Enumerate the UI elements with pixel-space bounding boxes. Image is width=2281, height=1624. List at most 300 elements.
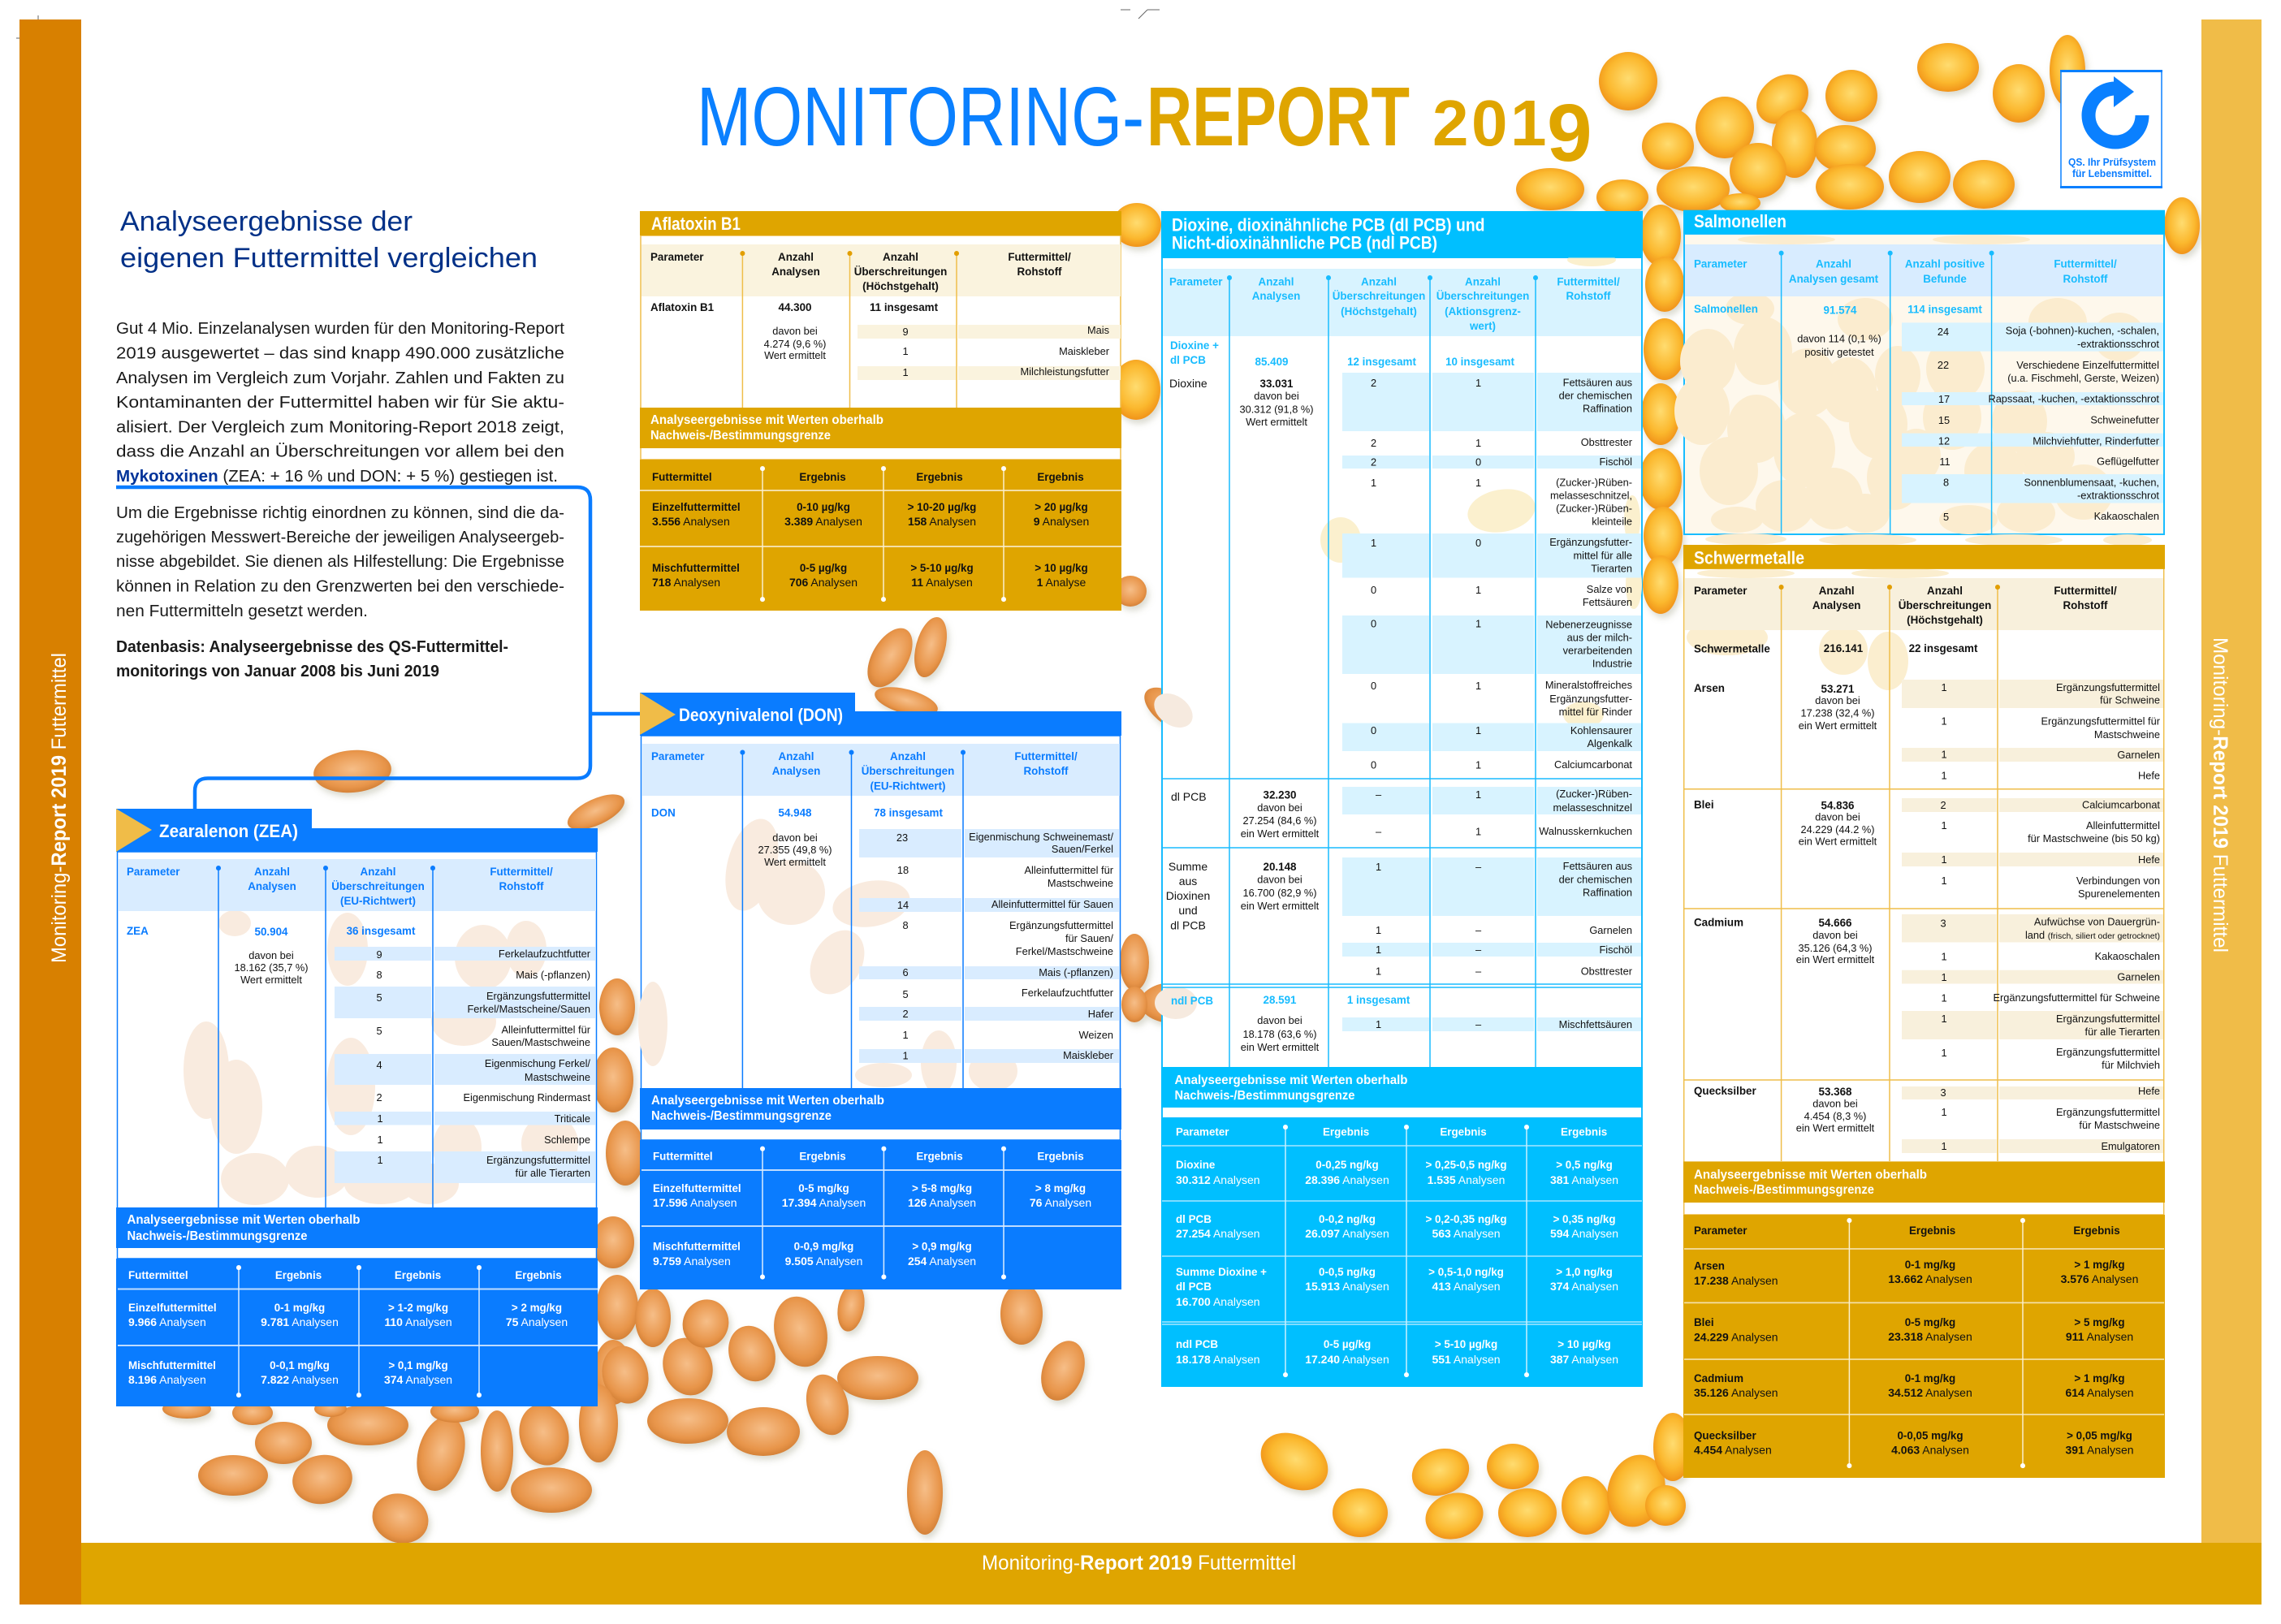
results table: > 0,2-0,35 ng/kg — [1425, 1213, 1507, 1225]
subheading band: Nachweis-/Bestimmungsgrenze — [1694, 1183, 1874, 1197]
subheading band: Nachweis-/Bestimmungsgrenze — [650, 429, 831, 443]
table rows: Soja (-bohnen)-kuchen, -schalen, — [2006, 325, 2159, 337]
rows: dl PCB: – — [1376, 788, 1382, 801]
text block: data basis: Datenbasis: Analyseergebnisse des QS-Futtermittel- — [116, 638, 508, 656]
table rows: Verschiedene Einzelfuttermittel — [2016, 359, 2159, 371]
results table: 15.913 Analysen — [1305, 1280, 1389, 1293]
table rows: 17 — [1938, 393, 1950, 405]
rows: Dioxine + dl PCB: 10 insgesamt — [1445, 356, 1514, 368]
logo: QS: QS. Ihr Prüfsystem — [2068, 156, 2156, 168]
rows: Quecksilber: ein Wert ermittelt — [1796, 1122, 1875, 1134]
rows: Dioxine + dl PCB — [1169, 339, 1633, 771]
rows: Quecksilber: für Mastschweine — [2079, 1119, 2160, 1131]
results table: > 5-8 mg/kg — [912, 1182, 972, 1194]
table rows: 1 — [902, 345, 909, 357]
rows: Cadmium: für Milchvieh — [2102, 1059, 2160, 1071]
rows: Dioxine + dl PCB: 0 — [1371, 724, 1376, 736]
table rows: positiv getestet — [1804, 346, 1874, 358]
results table: > 0,35 ng/kg — [1553, 1213, 1616, 1225]
rows: Dioxine + dl PCB: der chemischen — [1559, 390, 1632, 401]
rows: Summe aus Dioxinen und dl PCB: dl PCB — [1170, 919, 1206, 932]
rows: Dioxine + dl PCB: Fischöl — [1599, 456, 1632, 468]
logo: QS — [2060, 70, 2162, 188]
rows: Arsen: 1 — [1941, 749, 1947, 760]
title: MONITORING- — [697, 70, 1144, 163]
rows: Quecksilber: Hefe — [2138, 1085, 2160, 1097]
results table: 76 Analysen — [1030, 1196, 1091, 1209]
results table: Futtermittel — [128, 1269, 188, 1281]
results table: 4.454 Analysen — [1694, 1444, 1772, 1457]
rows: Blei: Spurenelementen — [2078, 888, 2160, 900]
results table: ndl PCB — [1176, 1338, 1218, 1350]
table header: Futtermittel/ — [1008, 251, 1071, 263]
rows: Dioxine + dl PCB: 0 — [1371, 758, 1376, 771]
rows: Cadmium: Aufwüchse von Dauergrün- — [2034, 916, 2160, 928]
rows: Dioxine + dl PCB: davon bei — [1254, 390, 1299, 402]
table rows: 9 — [902, 326, 909, 338]
rows: Arsen: 1 — [1941, 681, 1947, 693]
rows: Blei: für Mastschweine (bis 50 kg) — [2028, 832, 2160, 844]
results table: Arsen — [1694, 1260, 1725, 1272]
rows: Summe aus Dioxinen und dl PCB: – — [1475, 965, 1482, 978]
right side bar — [2201, 19, 2262, 1605]
rows: Summe aus Dioxinen und dl PCB: davon bei — [1257, 874, 1303, 885]
results table: 9.759 Analysen — [653, 1255, 731, 1268]
results table: 563 Analysen — [1432, 1227, 1501, 1240]
results table: 23.318 Analysen — [1888, 1330, 1972, 1343]
rows: Dioxine + dl PCB: Fettsäuren — [1583, 596, 1632, 608]
table rows: Wert ermittelt — [240, 974, 302, 986]
rows: Dioxine + dl PCB: 2 — [1371, 377, 1376, 389]
results table: 706 Analysen — [789, 576, 858, 589]
results table: > 1-2 mg/kg — [388, 1302, 448, 1314]
rows: Cadmium: 1 — [1941, 1047, 1947, 1059]
table rows: 1 — [377, 1134, 383, 1146]
rows: Cadmium: land (frisch, siliert oder getrocknet) — [2025, 929, 2160, 941]
results table: 126 Analysen — [908, 1196, 976, 1209]
rows: Summe aus Dioxinen und dl PCB: Fettsäuren aus — [1563, 860, 1632, 872]
results table: 158 Analysen — [908, 515, 976, 528]
text block: intro: Mykotoxinen (ZEA: + 16 % und DON: + 5 %) gestiegen ist. — [116, 468, 558, 486]
results table: 551 Analysen — [1432, 1353, 1501, 1366]
table header: Futtermittel/ — [490, 866, 553, 878]
results table: 1 Analyse — [1037, 576, 1086, 589]
table header: Anzahl positive — [1905, 257, 1985, 270]
results table: 0-0,25 ng/kg — [1315, 1159, 1379, 1171]
results table: Einzelfuttermittel — [652, 501, 741, 513]
table header: Anzahl — [1816, 257, 1851, 270]
results table: 9.505 Analysen — [785, 1255, 862, 1268]
rows: Dioxine + dl PCB: Mineralstoffreiches — [1545, 679, 1632, 691]
results table: > 2 mg/kg — [512, 1302, 562, 1314]
subheading band: Analyseergebnisse mit Werten oberhalb — [651, 1094, 884, 1108]
results table: 0-1 mg/kg — [1905, 1259, 1955, 1271]
results table: Blei — [1694, 1316, 1714, 1328]
table rows: Sauen/Ferkel — [1052, 843, 1113, 855]
results table: 374 Analysen — [384, 1373, 452, 1386]
results table: 391 Analysen — [2065, 1444, 2134, 1457]
heading: Deoxynivalenol tab with arrow — [640, 693, 1121, 736]
results table: > 0,1 mg/kg — [388, 1359, 448, 1371]
table rows: 1 — [377, 1112, 383, 1125]
table header: (Höchstgehalt) — [862, 280, 939, 292]
heading: Zearalenon tab with arrow: Zearalenon (ZEA) — [159, 821, 298, 841]
rows: Quecksilber: Quecksilber — [1694, 1085, 1756, 1097]
text block: intro: 2019 ausgewertet – das sind knapp 490.000 zusätzliche — [116, 344, 564, 362]
rows: Dioxine + dl PCB: 0 — [1371, 680, 1376, 692]
rows: Summe aus Dioxinen und dl PCB: 16.700 (82,9 %) — [1242, 887, 1317, 899]
rows: Arsen: für Schweine — [2100, 694, 2160, 706]
results table: dl PCB — [1176, 1281, 1212, 1293]
rows: Dioxine + dl PCB: 1 — [1371, 537, 1376, 549]
panel: Zearalenon (ZEA) — [116, 809, 598, 1406]
rows: Dioxine + dl PCB: Algenkalk — [1587, 737, 1633, 749]
table header: Überschreitungen — [1899, 599, 1991, 611]
rows: Dioxine + dl PCB: (Zucker-)Rüben- — [1556, 503, 1632, 515]
results table — [640, 460, 1121, 611]
table rows: Eigenmischung Schweinemast/ — [969, 831, 1113, 843]
results table: Mischfuttermittel — [652, 562, 740, 574]
table rows: Eigenmischung Rindermast — [464, 1091, 590, 1104]
rows: Summe aus Dioxinen und dl PCB: – — [1475, 944, 1482, 956]
rows: Dioxine + dl PCB: melasseschnitzel, — [1550, 489, 1632, 502]
results table: 594 Analysen — [1550, 1227, 1618, 1240]
results table: > 20 µg/kg — [1035, 501, 1088, 513]
results table: Ergebnis — [916, 471, 963, 483]
rows: ndl PCB: ndl PCB — [1171, 995, 1213, 1007]
rows: dl PCB: – — [1376, 826, 1382, 838]
table rows: 9 — [376, 948, 382, 961]
rows: Cadmium: Cadmium — [1694, 917, 1743, 929]
rows: Blei: 2 — [1940, 799, 1946, 811]
table rows: 54.948 — [779, 807, 812, 818]
results table: 0-1 mg/kg — [1905, 1372, 1955, 1384]
table header: Rohstoff — [1566, 290, 1611, 302]
rows: Blei: Verbindungen von — [2076, 875, 2160, 887]
rows: Arsen: Ergänzungsfuttermittel für — [2041, 715, 2161, 728]
bottom band: Monitoring-Report 2019 Futtermittel — [982, 1552, 1296, 1574]
results table: 34.512 Analysen — [1888, 1386, 1972, 1399]
table rows: 1 — [902, 1049, 909, 1062]
results table: > 0,5 ng/kg — [1556, 1159, 1613, 1171]
table rows: Ferkelaufzuchtfutter — [1022, 987, 1114, 999]
table header: Rohstoff — [2063, 599, 2108, 611]
results table: 3.556 Analysen — [652, 515, 730, 528]
bottom band — [81, 1543, 2262, 1605]
results table: 17.596 Analysen — [653, 1196, 737, 1209]
table header: Rohstoff — [2063, 273, 2108, 285]
results table: > 10-20 µg/kg — [908, 501, 976, 513]
title: 1 — [1510, 87, 1546, 159]
results table: 0-1 mg/kg — [274, 1302, 325, 1314]
results table: > 0,05 mg/kg — [2067, 1430, 2132, 1442]
table header — [1694, 257, 2117, 285]
rows: Arsen: Mastschweine — [2094, 728, 2160, 741]
rows: Blei: Hefe — [2138, 853, 2160, 866]
table rows: Mastschweine — [525, 1071, 590, 1083]
table rows — [650, 301, 1110, 378]
table rows: Schweinefutter — [2090, 414, 2160, 425]
subheading band: Analyseergebnisse mit Werten oberhalb — [1174, 1073, 1408, 1087]
results table: 387 Analysen — [1550, 1353, 1618, 1366]
table rows: 8 — [902, 919, 909, 931]
heading: Dioxine — [1161, 211, 1643, 258]
rows: Dioxine + dl PCB: mittel für Rinder — [1559, 706, 1633, 718]
rows: Summe aus Dioxinen und dl PCB: Fischöl — [1599, 944, 1632, 956]
subheading band — [116, 1207, 598, 1248]
results table: Ergebnis — [2073, 1224, 2120, 1237]
table rows: Ferkelaufzuchtfutter — [499, 948, 591, 960]
rows: Quecksilber — [1694, 1085, 2160, 1152]
rows: Summe aus Dioxinen und dl PCB: und — [1178, 904, 1198, 917]
table header — [1169, 276, 1620, 332]
table header: Analysen — [1252, 290, 1300, 302]
table rows: Maiskleber — [1059, 345, 1110, 357]
rows: Cadmium: 1 — [1941, 992, 1947, 1004]
table rows: Alleinfuttermittel für Sauen — [991, 898, 1113, 910]
rows: Dioxine + dl PCB: 2 — [1371, 437, 1376, 449]
rows: Dioxine + dl PCB: Calciumcarbonat — [1554, 758, 1632, 771]
rows: Dioxine + dl PCB: 1 — [1371, 477, 1376, 489]
table rows: 5 — [902, 988, 909, 1000]
table header: Analysen — [771, 266, 820, 278]
results table: 1.535 Analysen — [1428, 1173, 1505, 1186]
rows: Summe aus Dioxinen und dl PCB: 1 — [1376, 861, 1381, 873]
results table: 110 Analysen — [384, 1315, 452, 1328]
table header: Überschreitungen — [862, 765, 954, 777]
rows: Dioxine + dl PCB: 0 — [1371, 617, 1376, 630]
logo: QS: für Lebensmittel. — [2072, 167, 2152, 179]
rows: Dioxine + dl PCB: aus der milch- — [1567, 632, 1632, 643]
rows: Dioxine + dl PCB: 12 insgesamt — [1347, 356, 1416, 368]
rows: Blei: 1 — [1941, 853, 1947, 866]
table rows: 27.355 (49,8 %) — [758, 844, 832, 856]
table header: Überschreitungen — [331, 880, 425, 892]
table header: Futtermittel/ — [2054, 257, 2117, 270]
title: REPORT — [1147, 70, 1410, 163]
table header: Analysen — [1812, 599, 1860, 611]
results table: Ergebnis — [395, 1269, 441, 1281]
results table: 0-5 mg/kg — [798, 1182, 849, 1194]
results table: 3.389 Analysen — [784, 515, 862, 528]
subheading band: Nachweis-/Bestimmungsgrenze — [127, 1229, 308, 1243]
table rows: Salmonellen — [1694, 303, 1758, 315]
rows: Summe aus Dioxinen und dl PCB — [1166, 860, 1633, 978]
table header — [1694, 585, 2117, 626]
heading: Salmonellen: Salmonellen — [1694, 211, 1786, 231]
rows: Arsen: Ergänzungsfuttermittel — [2056, 681, 2160, 693]
heading: Aflatoxin B1: Aflatoxin B1 — [651, 214, 741, 234]
heading: Schwermetalle — [1683, 545, 2165, 569]
table rows: Alleinfuttermittel für — [1024, 864, 1114, 876]
table rows: Ergänzungsfuttermittel — [1009, 919, 1113, 931]
table rows: -extraktionsschrot — [2077, 490, 2159, 502]
table header: Anzahl — [1927, 585, 1963, 597]
results table: 9.781 Analysen — [261, 1315, 339, 1328]
title: 9 — [1547, 88, 1592, 179]
results table: Einzelfuttermittel — [128, 1302, 217, 1314]
table rows: davon bei — [772, 325, 818, 337]
heading: Aflatoxin B1 — [640, 211, 1121, 235]
table rows: Hafer — [1088, 1008, 1114, 1020]
rows: Dioxine + dl PCB: Dioxine + — [1170, 339, 1219, 352]
rows: Summe aus Dioxinen und dl PCB: aus — [1179, 875, 1197, 888]
rows: ndl PCB — [1171, 994, 1632, 1053]
results table: 4.063 Analysen — [1891, 1444, 1969, 1457]
rows: Cadmium: Kakaoschalen — [2095, 950, 2160, 962]
results table — [1683, 1215, 2165, 1478]
subheading band — [640, 1088, 1121, 1129]
rows: Dioxine + dl PCB: 0 — [1475, 456, 1481, 469]
title — [697, 70, 1592, 179]
rows: dl PCB: Walnusskernkuchen — [1539, 825, 1632, 837]
rows: ndl PCB: 1 insgesamt — [1347, 994, 1411, 1006]
corn kernels: upper right — [1112, 35, 2200, 614]
rows: Summe aus Dioxinen und dl PCB: Dioxinen — [1166, 889, 1210, 902]
heading: left column: eigenen Futtermittel vergleichen — [120, 243, 538, 274]
panel: Schwermetalle — [1683, 545, 2165, 1478]
results table: Ergebnis — [799, 471, 846, 483]
rows: Cadmium: 54.666 — [1819, 917, 1851, 929]
rows: Summe aus Dioxinen und dl PCB: ein Wert ermittelt — [1241, 900, 1320, 912]
table header: Parameter — [1169, 276, 1223, 287]
table header: Parameter — [127, 866, 180, 878]
table header: Futtermittel/ — [2054, 585, 2117, 597]
rows: Arsen: Hefe — [2138, 770, 2160, 781]
table rows: Maiskleber — [1063, 1049, 1114, 1061]
rows: Blei: Alleinfuttermittel — [2086, 819, 2160, 831]
rows: Cadmium: für alle Tierarten — [2085, 1026, 2160, 1038]
rows: Cadmium: ein Wert ermittelt — [1796, 953, 1875, 965]
rows: dl PCB: 32.230 — [1264, 788, 1296, 801]
left side bar — [19, 19, 81, 1605]
rows: Quecksilber: 53.368 — [1819, 1086, 1852, 1098]
table header: Anzahl — [1819, 585, 1855, 597]
rows: ndl PCB: Mischfettsäuren — [1559, 1018, 1632, 1030]
table header: Überschreitungen — [1436, 290, 1529, 302]
table rows: 8 — [376, 969, 382, 981]
table rows: Ferkel/Mastschweine — [1016, 945, 1113, 957]
table rows: 44.300 — [779, 301, 811, 313]
table header: Rohstoff — [499, 880, 544, 892]
table rows: 18.162 (35,7 %) — [234, 961, 309, 974]
rows: dl PCB: melasseschnitzel — [1553, 801, 1632, 814]
rows: Arsen — [1694, 681, 2161, 781]
rows: Quecksilber: Emulgatoren — [2101, 1140, 2160, 1152]
table rows: für alle Tierarten — [516, 1167, 590, 1179]
rows: dl PCB: davon bei — [1257, 801, 1303, 814]
table rows: Ergänzungsfuttermittel — [486, 1154, 590, 1166]
text block: data basis — [116, 638, 508, 680]
rows: dl PCB — [1171, 788, 1632, 840]
panel: Aflatoxin B1 — [640, 211, 1121, 611]
heading: Schwermetalle: Schwermetalle — [1694, 548, 1804, 568]
text block: intro: dass die Anzahl an Überschreitungen vor allem bei den — [116, 443, 564, 461]
rows: Summe aus Dioxinen und dl PCB: Garnelen — [1589, 924, 1632, 936]
table rows: 5 — [376, 1025, 382, 1037]
rows: Summe aus Dioxinen und dl PCB: Obsttrester — [1581, 965, 1633, 978]
table rows: 5 — [376, 991, 382, 1004]
rows: ndl PCB: 18.178 (63,6 %) — [1242, 1028, 1317, 1040]
table rows: für Sauen/ — [1065, 932, 1113, 944]
results table: 35.126 Analysen — [1694, 1386, 1778, 1399]
rows: dl PCB: (Zucker-)Rüben- — [1556, 788, 1632, 800]
rows: Blei: ein Wert ermittelt — [1799, 836, 1877, 848]
results table: 18.178 Analysen — [1176, 1353, 1260, 1366]
results table: Parameter — [1694, 1224, 1747, 1237]
results table: 26.097 Analysen — [1305, 1227, 1389, 1240]
title: 2 — [1432, 87, 1468, 159]
results table: 3.576 Analysen — [2061, 1272, 2138, 1285]
results table: 17.240 Analysen — [1305, 1353, 1389, 1366]
results table: 0-0,2 ng/kg — [1319, 1213, 1376, 1225]
rows: Dioxine + dl PCB: Dioxine — [1169, 377, 1207, 390]
rows: ndl PCB: davon bei — [1257, 1014, 1303, 1026]
rows: Dioxine + dl PCB: (Zucker-)Rüben- — [1556, 476, 1632, 489]
rows: Dioxine + dl PCB: Kohlensaurer — [1570, 724, 1633, 736]
table rows: Rapssaat, -kuchen, -extaktionsschrot — [1988, 392, 2159, 404]
results table: > 0,25-0,5 ng/kg — [1425, 1159, 1507, 1171]
table header: Parameter — [1694, 585, 1747, 597]
results table: 0-10 µg/kg — [797, 501, 850, 513]
rows: Cadmium: davon bei — [1812, 929, 1858, 941]
rows: Blei: 54.836 — [1821, 800, 1854, 812]
table rows: Wert ermittelt — [764, 856, 826, 868]
rows: Dioxine + dl PCB: Raffination — [1583, 403, 1632, 414]
rows: Arsen: Arsen — [1694, 682, 1725, 694]
right side bar: Monitoring-Report 2019 Futtermittel — [2209, 637, 2231, 952]
rows: Summe aus Dioxinen und dl PCB: der chemischen — [1559, 874, 1632, 885]
rows: Dioxine + dl PCB: Fettsäuren aus — [1563, 377, 1632, 388]
panel: Salmonellen — [1674, 210, 2165, 534]
results table: Ergebnis — [916, 1150, 963, 1163]
table header: Überschreitungen — [854, 266, 947, 278]
rows: Dioxine + dl PCB: Obsttrester — [1581, 436, 1633, 448]
table rows: 78 insgesamt — [874, 807, 943, 818]
table header: Futtermittel/ — [1557, 276, 1620, 287]
wheat grains: below and between the left tables — [162, 576, 1208, 1551]
rows: Summe aus Dioxinen und dl PCB: Summe — [1169, 860, 1207, 873]
results table: 16.700 Analysen — [1176, 1295, 1260, 1308]
rows: Arsen: ein Wert ermittelt — [1799, 719, 1877, 732]
results table: 254 Analysen — [908, 1255, 976, 1268]
rows: Dioxine + dl PCB: Ergänzungsfutter- — [1549, 693, 1632, 705]
table header: Anzahl — [1361, 276, 1397, 287]
table rows: 11 insgesamt — [870, 301, 939, 313]
rows: Blei — [1694, 799, 2160, 900]
table rows: davon 114 (0,1 %) — [1797, 333, 1881, 345]
rows: Dioxine + dl PCB: kleinteile — [1592, 516, 1632, 528]
table header: (EU-Richtwert) — [340, 895, 416, 907]
results table: Dioxine — [1176, 1159, 1215, 1171]
results table: > 5 mg/kg — [2074, 1316, 2125, 1328]
table header: Anzahl — [1259, 276, 1294, 287]
text block: explanation: Um die Ergebnisse richtig einordnen zu können, sind die da- — [116, 504, 564, 522]
text block: intro: Kontaminanten der Futtermittel haben wir für Sie aktu- — [116, 394, 564, 412]
results table: Ergebnis — [799, 1150, 846, 1163]
table header: Überschreitungen — [1333, 290, 1425, 302]
table header: (Höchstgehalt) — [1341, 305, 1417, 317]
table header: Anzahl — [890, 750, 926, 762]
text block: intro: alisiert. Der Vergleich zum Monitoring-Report 2018 zeigt, — [116, 419, 564, 437]
results table: > 5-10 µg/kg — [910, 562, 974, 574]
results table: Ergebnis — [1323, 1126, 1369, 1138]
rows: Dioxine + dl PCB: 1 — [1475, 724, 1481, 736]
text block: intro: Analysen im Vergleich zum Vorjahr. Zahlen und Fakten zu — [116, 369, 564, 387]
results table: 17.394 Analysen — [782, 1196, 866, 1209]
heading: Dioxine: Dioxine, dioxinähnliche PCB (dl PCB) und — [1172, 214, 1484, 235]
rows: Dioxine + dl PCB: 1 — [1475, 758, 1481, 771]
